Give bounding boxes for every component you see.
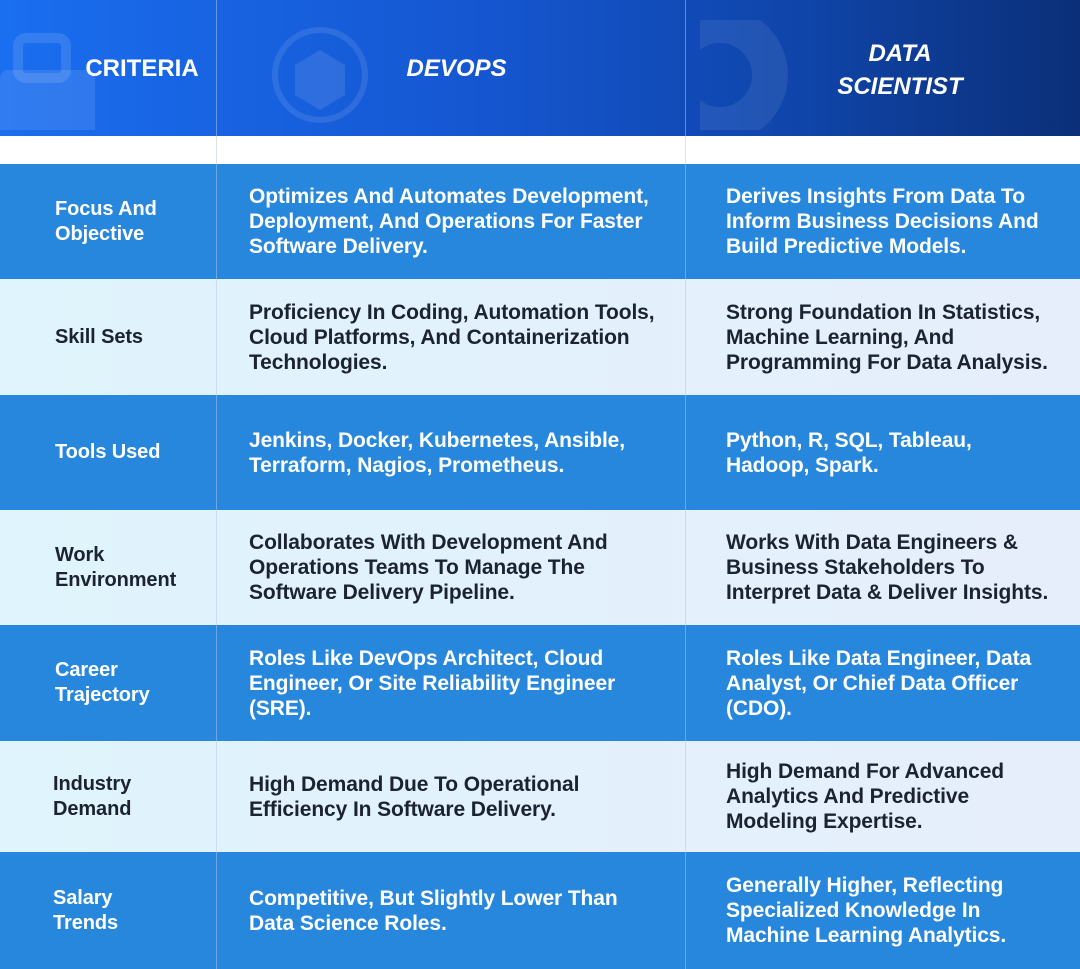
row: tools [0,395,1080,510]
devops text: (SRE). [249,696,311,720]
heading: devops: DEVOPS [406,54,507,82]
criteria label: Trajectory [55,684,150,706]
data scientist text: Inform Business Decisions And [726,210,1039,233]
devops text: Data Science Roles. [249,912,447,934]
header band [0,0,1080,136]
row: focus [0,164,1080,279]
devops text [249,428,625,476]
data scientist text: Works With Data Engineers & [726,531,1018,554]
devops text: Operations Teams To Manage The [249,556,585,579]
criteria label [55,198,157,244]
row: salary [0,852,1080,969]
devops text [249,300,655,374]
data scientist text: Python, R, SQL, Tableau, [726,428,972,452]
icon: gear [700,20,788,130]
row: career [0,625,1080,741]
heading: criteria: CRITERIA [85,54,199,82]
devops text: Software Delivery Pipeline. [249,581,515,604]
criteria label [55,544,176,590]
data scientist text: Specialized Knowledge In [726,899,980,922]
devops text: Competitive, But Slightly Lower Than [249,886,618,910]
criteria label: Career [55,659,118,681]
devops text: Terraform, Nagios, Prometheus. [249,454,564,476]
icon: briefcase [0,33,95,130]
data scientist text: High Demand For Advanced [726,760,1004,783]
data scientist text: Strong Foundation In Statistics, [726,300,1040,324]
devops text: Jenkins, Docker, Kubernetes, Ansible, [249,428,625,452]
devops text [249,531,608,604]
devops text: Roles Like DevOps Architect, Cloud [249,646,603,670]
devops text [249,772,579,820]
devops text: High Demand Due To Operational [249,772,579,796]
criteria label: Focus And [55,198,157,220]
data scientist text [726,300,1048,374]
devops text: Software Delivery. [249,235,428,258]
heading: data scientist: DATA [868,40,932,67]
data scientist text: Interpret Data & Deliver Insights. [726,581,1048,604]
data scientist text [726,646,1032,720]
criteria label: Demand [53,798,131,820]
devops text: Engineer, Or Site Reliability Engineer [249,672,615,694]
heading: data scientist: SCIENTIST [837,73,963,100]
data scientist text [726,428,972,476]
heading: data scientist [837,40,964,100]
criteria label: Industry [53,772,131,794]
criteria label [53,886,118,934]
criteria label: Skill Sets [55,326,143,348]
criteria label: Environment [55,568,176,590]
data scientist text [726,185,1039,258]
criteria label: Tools Used [55,441,160,463]
row: environment [0,510,1080,625]
icon: cube cycle [272,27,368,123]
data scientist text [726,874,1006,947]
devops text: Cloud Platforms, And Containerization [249,326,630,348]
criteria label [55,659,150,706]
data scientist text: Modeling Expertise. [726,810,922,833]
data scientist text: Business Stakeholders To [726,556,985,579]
criteria label: Objective [55,222,144,244]
data scientist text: Analyst, Or Chief Data Officer [726,672,1018,694]
data scientist text: Build Predictive Models. [726,235,966,258]
devops text: Proficiency In Coding, Automation Tools, [249,300,655,324]
data scientist text: Roles Like Data Engineer, Data [726,646,1031,670]
row: skills [0,279,1080,395]
devops text: Technologies. [249,350,387,374]
data scientist text: Analytics And Predictive [726,785,969,808]
row: demand [0,741,1080,852]
devops text: Collaborates With Development And [249,531,608,554]
devops text [249,886,618,934]
criteria label: Trends [53,912,118,934]
data scientist text: Generally Higher, Reflecting [726,874,1003,897]
data scientist text: Machine Learning, And [726,326,954,348]
data scientist text: Programming For Data Analysis. [726,350,1048,374]
devops text: Deployment, And Operations For Faster [249,210,642,233]
criteria label: Work [55,544,104,566]
data scientist text [726,531,1048,604]
devops text [249,646,615,720]
data scientist text [726,760,1004,833]
data scientist text: Hadoop, Spark. [726,454,879,476]
data scientist text: Machine Learning Analytics. [726,924,1006,947]
data scientist text: (CDO). [726,696,792,720]
devops text: Efficiency In Software Delivery. [249,798,556,820]
criteria label: Salary [53,886,112,908]
data scientist text: Derives Insights From Data To [726,185,1025,208]
criteria label [53,772,132,820]
devops text: Optimizes And Automates Development, [249,185,649,208]
devops text [249,185,649,258]
